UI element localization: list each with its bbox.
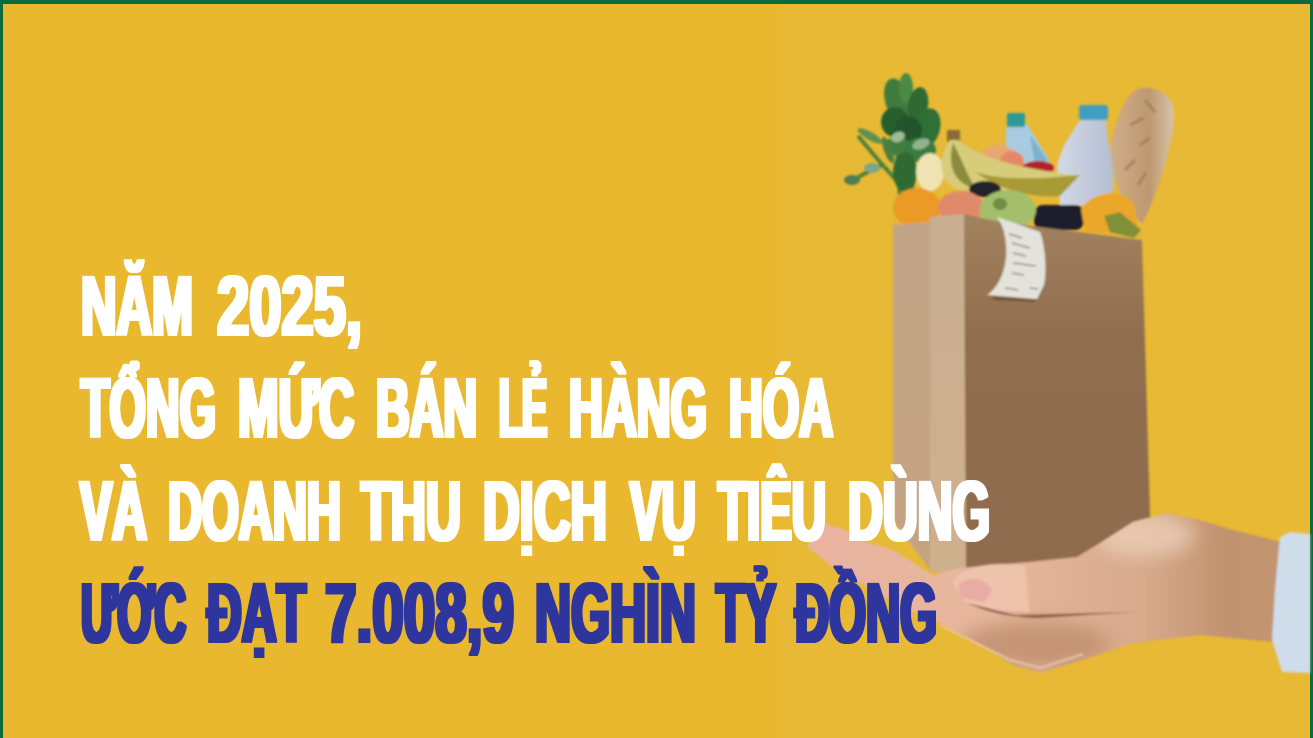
icon: water bottle — [1005, 113, 1052, 172]
headline line 4: highlighted value: ĐỒNG — [795, 566, 937, 660]
headline line 4: highlighted value: 7.008,9 — [325, 566, 514, 660]
headline line 3 — [80, 464, 990, 558]
icon: yellow pepper — [1081, 193, 1141, 238]
icon: orange — [893, 188, 941, 228]
headline line 4: highlighted value — [81, 566, 937, 660]
headline line 2: MỨC — [238, 361, 354, 455]
headline line 4: highlighted value: TỶ — [716, 566, 776, 660]
headline line 4: highlighted value: NGHÌN — [535, 566, 696, 660]
headline line 3: DOANH — [168, 464, 341, 558]
headline — [80, 259, 990, 660]
receipt — [987, 217, 1045, 302]
headline line 3: VÀ — [80, 464, 147, 558]
headline line 3: THU — [361, 464, 461, 558]
icon: peach — [938, 191, 984, 223]
shirt cuff — [1272, 532, 1310, 673]
bag fold panel — [930, 214, 966, 572]
headline line 2 — [81, 361, 833, 455]
icon: eggplants — [969, 181, 1084, 230]
icon: green apple — [980, 190, 1036, 230]
headline line 4: highlighted value: ĐẠT — [207, 566, 306, 660]
headline line 1: 2025, — [217, 259, 362, 353]
headline line 3: TIÊU — [718, 464, 826, 558]
bag front panel — [964, 214, 1150, 572]
headline line 3: DÙNG — [848, 464, 990, 558]
bag side panel — [893, 222, 930, 570]
headline line 2: HÀNG — [569, 361, 707, 455]
icon: bananas — [916, 130, 1080, 196]
headline line 2: LẺ — [499, 361, 547, 455]
icon: herbs — [844, 73, 945, 197]
headline line 4: highlighted value: ƯỚC — [81, 566, 186, 660]
headline line 1: NĂM — [81, 259, 193, 353]
headline line 3: VỤ — [630, 464, 696, 558]
icon: apples — [979, 145, 1054, 175]
icon: milk jug — [1057, 105, 1113, 205]
headline line 3: DỊCH — [483, 464, 607, 558]
icon: baguette — [1111, 88, 1174, 224]
headline line 2: BÁN — [376, 361, 477, 455]
hand — [807, 513, 1282, 673]
illustration: grocery bag on a hand — [807, 73, 1310, 673]
headline line 2: TỔNG — [81, 361, 216, 455]
headline line 2: HÓA — [729, 361, 833, 455]
headline line 1 — [81, 259, 362, 353]
